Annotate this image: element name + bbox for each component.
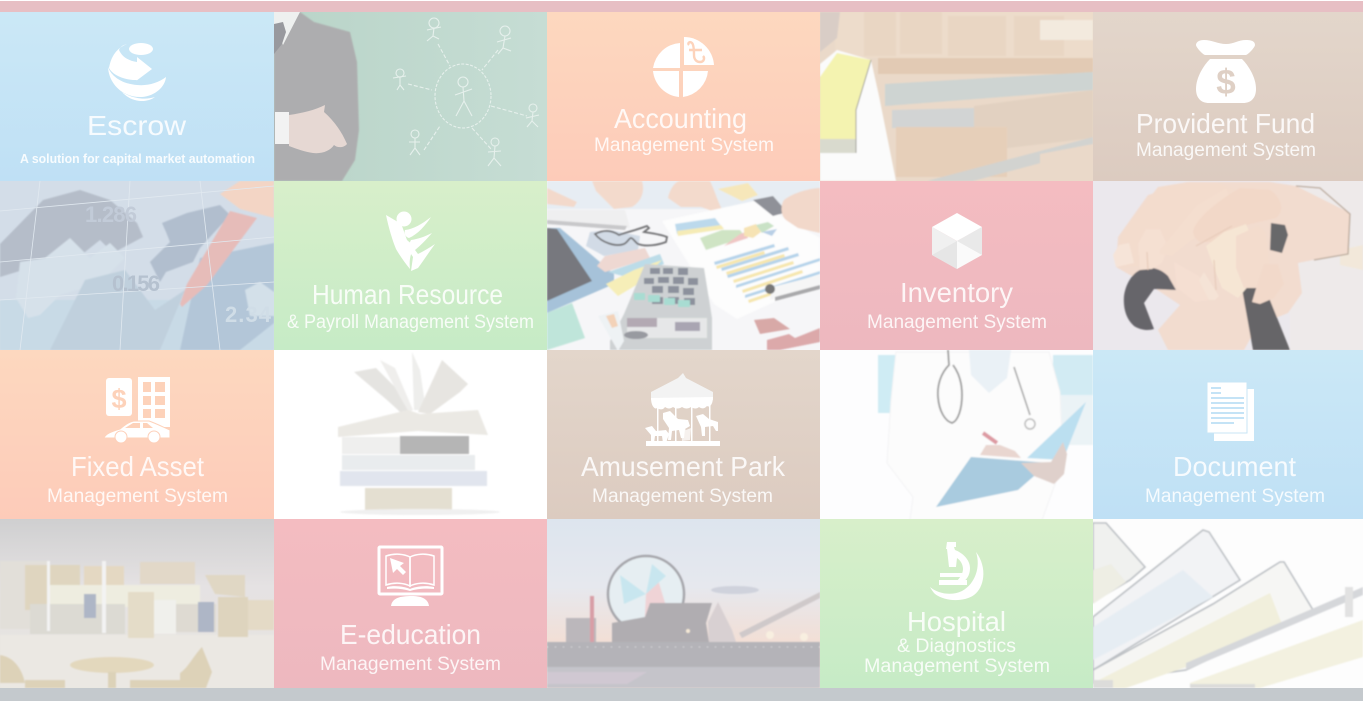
panel: photo of bull and bear market: 1.286 (85, 202, 137, 227)
subheading: Management System (594, 135, 774, 156)
panel: Hospital (820, 519, 1093, 688)
panel: E-education (274, 519, 547, 688)
heading: Provident Fund (1136, 108, 1315, 139)
fingers (1154, 182, 1190, 194)
subheading: Management System (47, 486, 228, 507)
icon: cube (932, 213, 982, 269)
icon: dollar, building and car (104, 377, 170, 443)
panel: photo of stacked books (338, 354, 498, 515)
panel: Document (1093, 350, 1363, 519)
icon: globe with arrow (108, 43, 166, 101)
panel: photo of bull and bear market: 0.156 (112, 271, 160, 296)
icon: money bag (1196, 40, 1256, 103)
icon: carousel (645, 373, 720, 446)
panel: photo of ring binders (1093, 519, 1363, 688)
icon: pie with taka sign (653, 37, 714, 97)
heading: Inventory (900, 277, 1013, 308)
panel: Accounting (547, 12, 820, 181)
subheading: Management System (592, 486, 773, 507)
subheading: A solution for capital market automation (20, 152, 255, 166)
heading: Human Resource (312, 279, 503, 310)
panel: photo of ferris wheel pier (547, 519, 820, 688)
subheading: Management System (320, 654, 501, 675)
panel: photo of bull and bear market: 2.34 (225, 302, 272, 327)
subheading: diagnostics: & Diagnostics (897, 636, 1016, 657)
subheading: Management System (867, 312, 1047, 333)
cane (1241, 283, 1290, 350)
panel: Escrow (0, 12, 274, 181)
heading: Accounting (614, 103, 747, 134)
panel: photo of businessman and chalkboard (274, 12, 547, 181)
panel: Amusement Park (547, 350, 820, 519)
subheading: Management System (1145, 486, 1325, 507)
panel: Human Resource (274, 181, 547, 350)
panel: photo of charts, calculator and hands (547, 181, 820, 351)
panel: Fixed Asset (0, 350, 274, 519)
heading: Fixed Asset (71, 451, 204, 482)
icon: dollar, building and car: $ (111, 384, 127, 414)
icon: monitor with book and cursor (379, 547, 442, 606)
panel: Provident Fund (1093, 12, 1363, 181)
icon: document pages (1207, 382, 1254, 441)
top bar (0, 1, 1363, 12)
subheading: Management System (864, 656, 1050, 677)
subheading: & Payroll Management System (287, 312, 534, 333)
panel: photo of warehouse worker (820, 12, 1093, 181)
panel: Inventory (820, 181, 1093, 350)
subheading: Management System (1136, 140, 1316, 161)
panel: photo of doctor with clipboard (877, 350, 1093, 508)
heading: E-education (340, 619, 481, 650)
panel: photo of office interior (0, 519, 274, 688)
panel: photo of bull and bear market (0, 181, 274, 350)
bottom bar (0, 688, 1363, 701)
icon: money bag: $ (1216, 63, 1236, 102)
heading: Escrow (87, 110, 187, 141)
heading: Amusement Park (581, 451, 786, 482)
heading: Hospital (907, 606, 1006, 637)
panel: photo of elderly hands on cane (1093, 181, 1363, 351)
heading: Document (1173, 451, 1296, 482)
icon: microscope and crescent (930, 542, 983, 600)
chalk drawing of people network (393, 18, 539, 166)
icon: people figures (386, 212, 435, 271)
hand base (1116, 182, 1350, 350)
